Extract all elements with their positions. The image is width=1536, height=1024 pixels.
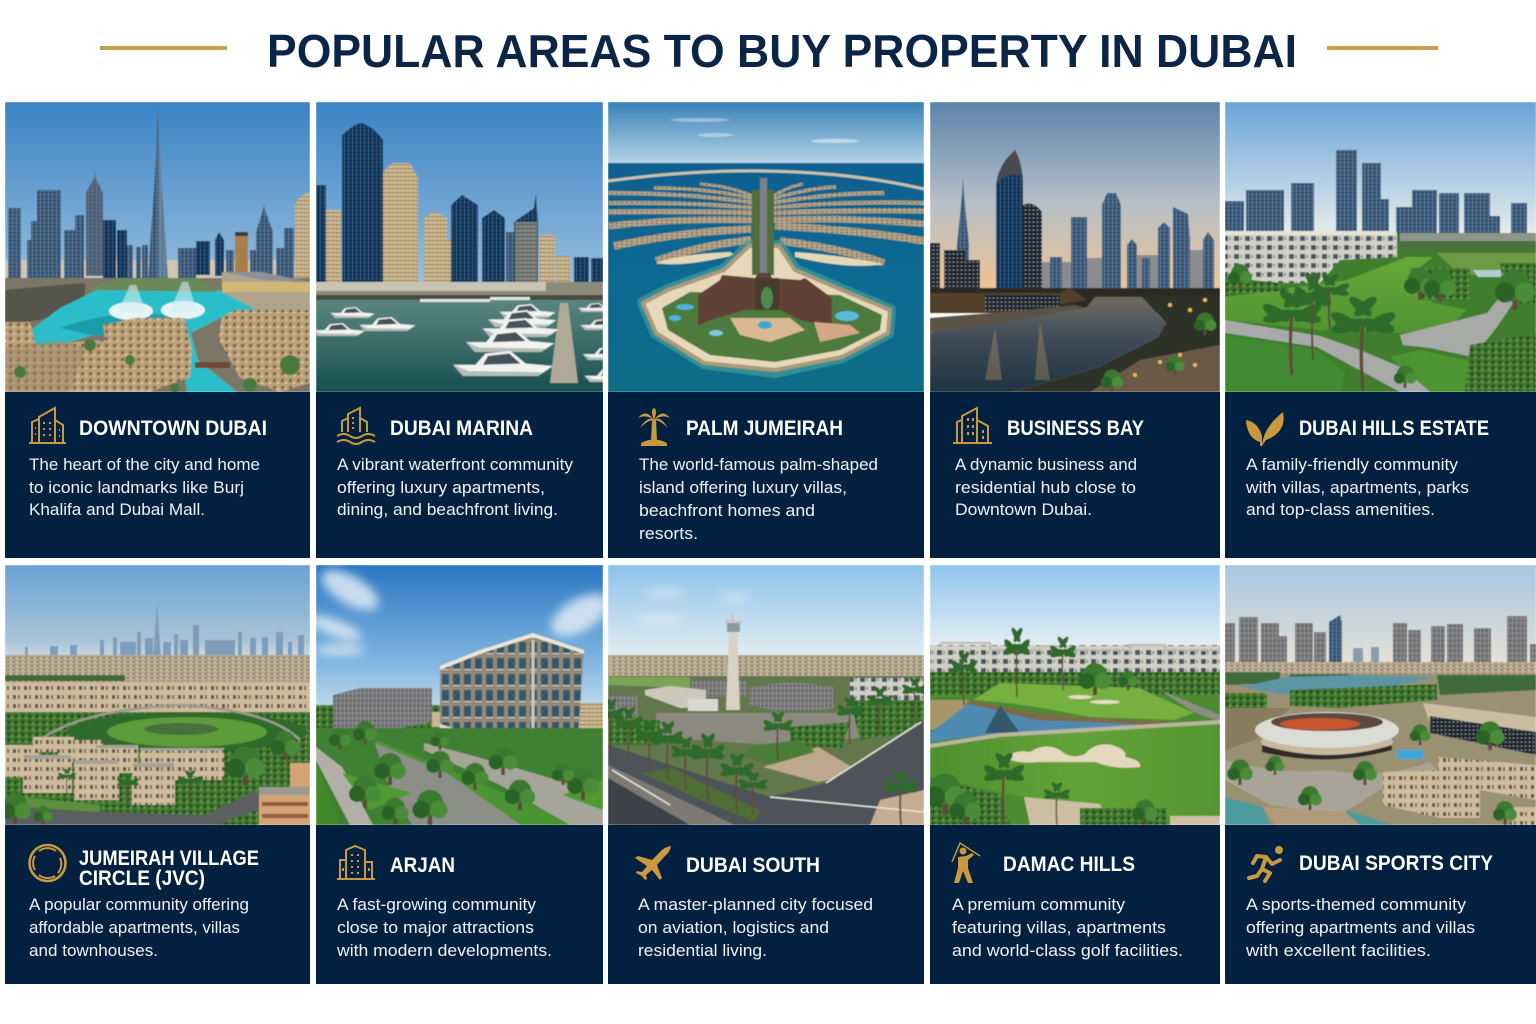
description: A family-friendly community: [1246, 455, 1459, 474]
icon: airplane: [635, 846, 671, 880]
description: close to major attractions: [337, 918, 534, 937]
panel: Dubai Marina: [316, 102, 603, 558]
description: Downtown Dubai.: [955, 500, 1092, 519]
panel: Dubai Hills Estate: [1225, 102, 1536, 558]
icon: apartment building: [337, 846, 375, 879]
description: to iconic landmarks like Burj: [29, 478, 244, 497]
icon: tower building: [29, 408, 66, 443]
info panel background: [1225, 392, 1536, 558]
panel: Palm Jumeirah: [608, 102, 924, 558]
description: [337, 455, 573, 519]
description: offering luxury apartments,: [337, 478, 545, 497]
description: offering apartments and villas: [1246, 918, 1475, 937]
panel: Jumeirah Village Circle: [0, 565, 310, 984]
description: [336, 895, 552, 960]
description: [952, 895, 1183, 960]
icon: leaf: [1246, 412, 1284, 446]
description: The world-famous palm-shaped: [639, 455, 878, 474]
heading: DUBAI MARINA: [390, 417, 533, 440]
icon: ring: [30, 845, 66, 881]
description: A fast-growing community: [337, 895, 536, 914]
panel: Downtown Dubai: [5, 102, 310, 558]
info panel background: [316, 392, 603, 558]
heading: DAMAC HILLS: [1003, 853, 1135, 876]
description: [29, 455, 260, 519]
icon: runner: [1249, 847, 1282, 881]
icon: office towers: [953, 408, 992, 443]
panel: Dubai Sports City: [1225, 565, 1536, 984]
heading: DUBAI SPORTS CITY: [1299, 852, 1493, 875]
info panel background: [930, 392, 1220, 558]
heading: DUBAI HILLS ESTATE: [1299, 417, 1489, 440]
image: Damac Hills golf course: [924, 565, 1220, 825]
icon: palm tree: [638, 408, 670, 446]
description: A master-planned city focused: [638, 895, 873, 914]
image: Dubai South control tower and roads: [597, 565, 929, 825]
description: Khalifa and Dubai Mall.: [29, 500, 205, 519]
description: A popular community offering: [29, 895, 249, 914]
panel: Arjan: [306, 562, 616, 984]
image: Palm Jumeirah aerial: [608, 102, 924, 392]
heading: DOWNTOWN DUBAI: [79, 417, 267, 440]
description: dining, and beachfront living.: [337, 500, 558, 519]
description: [639, 455, 878, 543]
description: and townhouses.: [29, 941, 158, 960]
image: Arjan apartment blocks and boulevard: [306, 562, 616, 825]
heading: JUMEIRAH VILLAGE: [79, 847, 259, 870]
image: JVC circular park aerial: [0, 565, 310, 825]
info panel background: [930, 825, 1220, 984]
description: affordable apartments, villas: [29, 918, 240, 937]
image: Dubai Sports City stadium: [1225, 565, 1536, 825]
info panel background: [1225, 825, 1536, 984]
description: with excellent facilities.: [1245, 941, 1431, 960]
image: Downtown Dubai skyline and fountain: [5, 102, 310, 393]
heading: ARJAN: [390, 854, 455, 877]
description: [638, 895, 873, 960]
description: with modern developments.: [336, 941, 552, 960]
title: POPULAR AREAS TO BUY PROPERTY IN DUBAI: [267, 25, 1297, 77]
info panel background: [608, 825, 924, 984]
description: island offering luxury villas,: [639, 478, 847, 497]
description: and world-class golf facilities.: [952, 941, 1183, 960]
description: beachfront homes and: [639, 501, 815, 520]
heading second line: CIRCLE (JVC): [79, 867, 205, 890]
icon: waterfront building: [337, 408, 375, 444]
description: with villas, apartments, parks: [1245, 478, 1469, 497]
heading: DUBAI SOUTH: [686, 854, 820, 877]
description: The heart of the city and home: [29, 455, 260, 474]
info panel background: [608, 392, 924, 558]
info panel background: [316, 825, 603, 984]
info panel background: [5, 825, 310, 984]
description: [955, 455, 1137, 519]
description: [1245, 895, 1475, 960]
description: and top-class amenities.: [1246, 500, 1435, 519]
description: featuring villas, apartments: [952, 918, 1166, 937]
panel: Damac Hills: [924, 565, 1220, 984]
image: Business Bay at sunset: [930, 102, 1220, 392]
description: residential hub close to: [955, 478, 1136, 497]
description: residential living.: [638, 941, 767, 960]
description: [29, 895, 249, 960]
image: Dubai Marina towers and yachts: [316, 102, 603, 392]
description: [1245, 455, 1469, 519]
description: A premium community: [952, 895, 1125, 914]
panel: Business Bay: [930, 102, 1220, 558]
info panel background: [5, 392, 310, 558]
icon: golfer: [952, 843, 980, 883]
description: A vibrant waterfront community: [337, 455, 573, 474]
description: resorts.: [639, 524, 698, 543]
image: Dubai Hills Estate park and villas: [1225, 102, 1536, 392]
description: A sports-themed community: [1246, 895, 1467, 914]
panel: Dubai South: [597, 565, 929, 984]
description: on aviation, logistics and: [638, 918, 829, 937]
description: A dynamic business and: [955, 455, 1137, 474]
heading: BUSINESS BAY: [1007, 417, 1144, 440]
heading: PALM JUMEIRAH: [686, 417, 843, 440]
